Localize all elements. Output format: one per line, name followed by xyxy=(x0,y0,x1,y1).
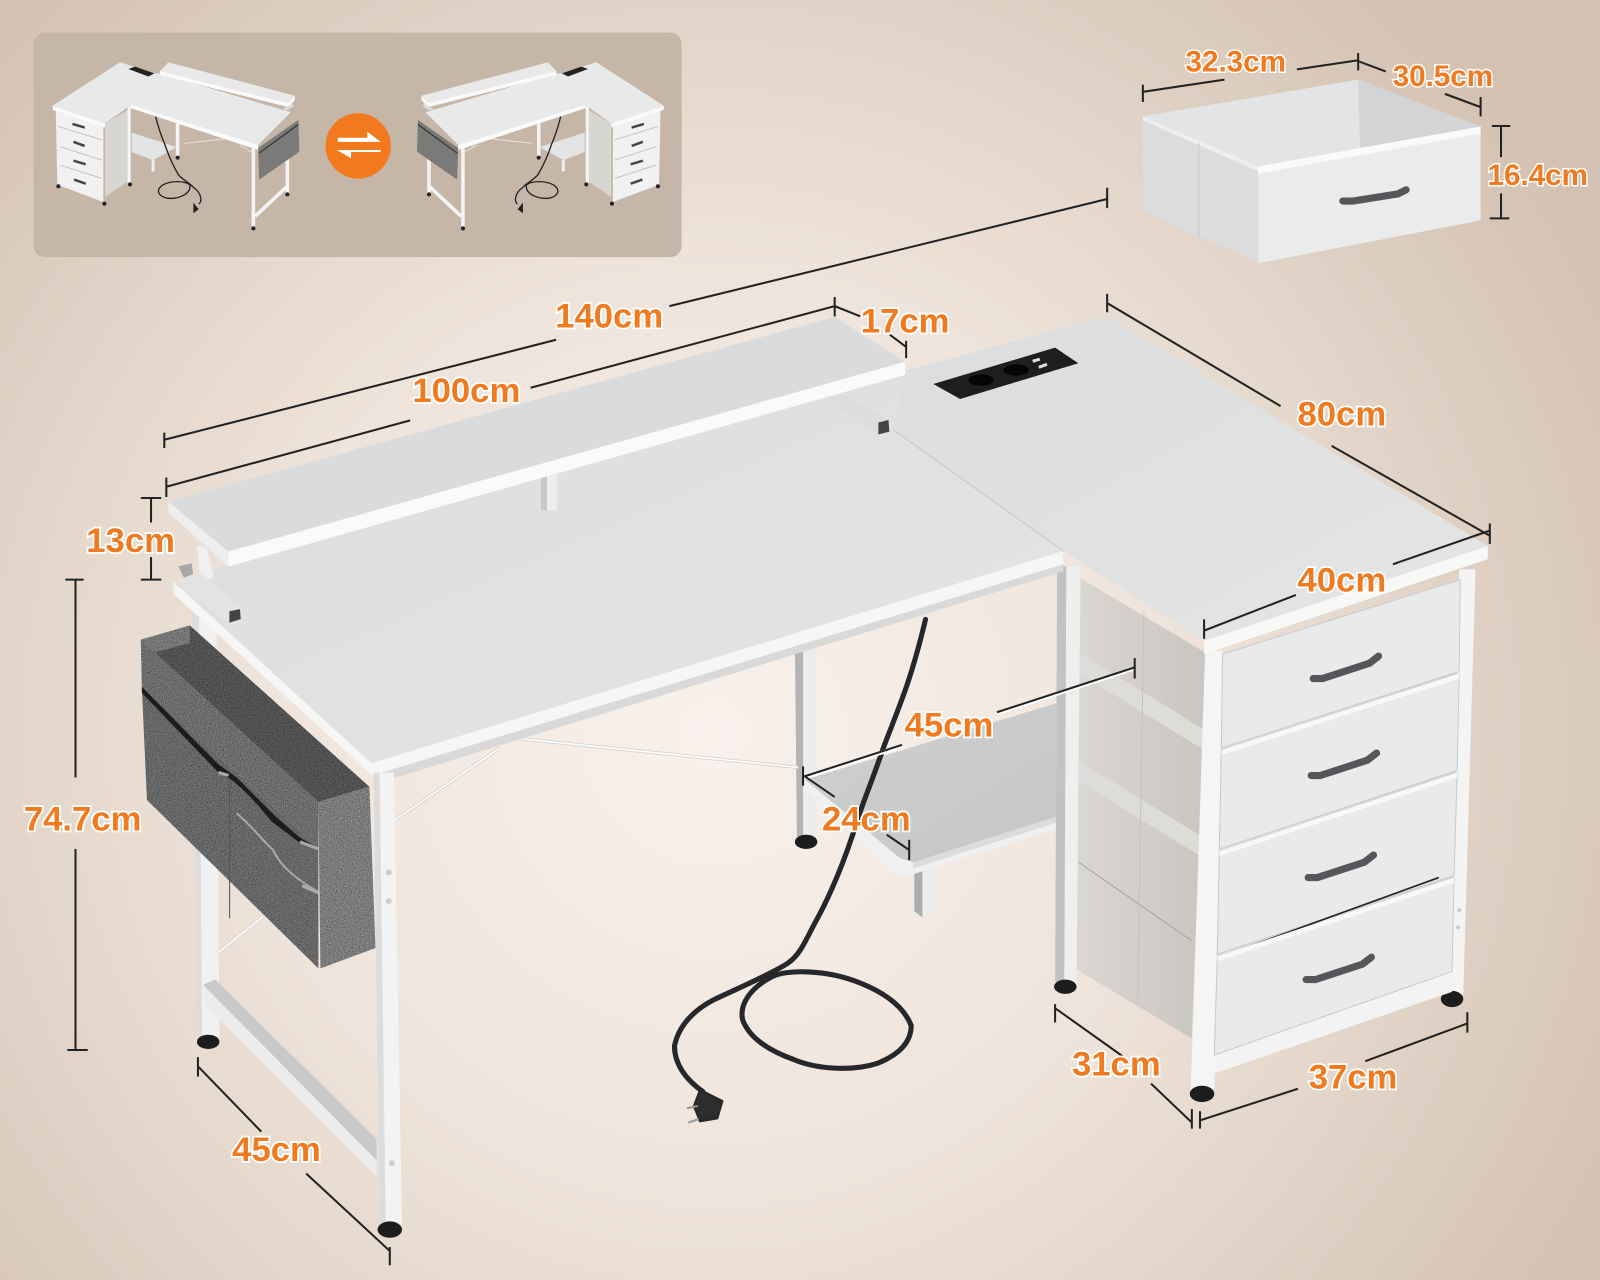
dimension: 45cm depth line xyxy=(198,1057,390,1265)
icon: desk with cabinet on the right xyxy=(417,62,664,230)
power strip xyxy=(933,348,1078,399)
icon: swap arrows badge xyxy=(326,113,391,179)
illustration: L-shaped desk xyxy=(141,316,1488,1238)
illustration: removable drawer xyxy=(1143,80,1481,263)
measurement labels: 45cm xyxy=(232,1131,321,1169)
drawer handle xyxy=(1343,190,1406,201)
drawers xyxy=(1214,580,1460,1055)
measurement labels: 24cm xyxy=(822,800,911,838)
measurement labels: 17cm xyxy=(861,302,949,340)
measurement labels: 13cm xyxy=(86,522,175,560)
corner desktop xyxy=(893,316,1488,654)
measurement labels: 74.7cm xyxy=(24,800,141,838)
measurement labels: 31cm xyxy=(1072,1045,1161,1083)
cabinet front post and base xyxy=(1190,651,1452,1102)
dimension: 17cm line xyxy=(835,306,906,358)
measurement labels: 140cm xyxy=(555,297,663,335)
measurement labels: 40cm xyxy=(1297,562,1386,600)
cabinet right post xyxy=(1441,569,1476,1007)
dimension: 45cm shelf line xyxy=(803,658,1135,786)
power cord and plug xyxy=(674,619,926,1122)
dimension: 45cm shelf line halo xyxy=(804,668,1135,778)
lower shelf xyxy=(803,703,1057,917)
cabinet fabric side xyxy=(1077,577,1206,1039)
under-desk back leg and braces xyxy=(393,643,817,849)
back left leg and rail xyxy=(192,612,377,1177)
side storage organizer xyxy=(141,626,376,968)
front left leg xyxy=(373,772,402,1238)
dimension: 32.3cm line xyxy=(1143,53,1358,102)
dimension: 100cm line xyxy=(166,297,835,497)
measurement labels: 32.3cm xyxy=(1186,46,1286,79)
measurement labels: 100cm xyxy=(412,372,520,410)
dimension: 30.5cm line xyxy=(1358,61,1481,116)
dimension: 74.7cm line xyxy=(65,580,88,1050)
dimension: 80cm line xyxy=(1107,294,1490,544)
monitor riser xyxy=(168,317,905,623)
cabinet rear post xyxy=(1054,566,1081,994)
icon: desk with cabinet on the left xyxy=(53,62,299,230)
measurement labels: 16.4cm xyxy=(1488,159,1588,192)
measurement labels: 37cm xyxy=(1309,1059,1397,1097)
dimension: 24cm line xyxy=(805,777,909,860)
measurement labels: 45cm xyxy=(905,707,993,745)
measurement labels: 80cm xyxy=(1297,395,1386,433)
drawer handles xyxy=(1306,656,1379,980)
dimension: 16.4cm line xyxy=(1490,126,1510,218)
dimension: 140cm line xyxy=(164,188,1107,448)
dimension: 40cm line xyxy=(1204,531,1490,639)
dimension: 31cm line xyxy=(1055,1004,1192,1129)
dimension: 13cm line xyxy=(141,498,161,580)
measurement labels: 30.5cm xyxy=(1393,60,1493,93)
dimension: 37cm line xyxy=(1200,1012,1467,1129)
main desktop xyxy=(173,372,1063,783)
panel: reversible layouts xyxy=(34,33,682,257)
